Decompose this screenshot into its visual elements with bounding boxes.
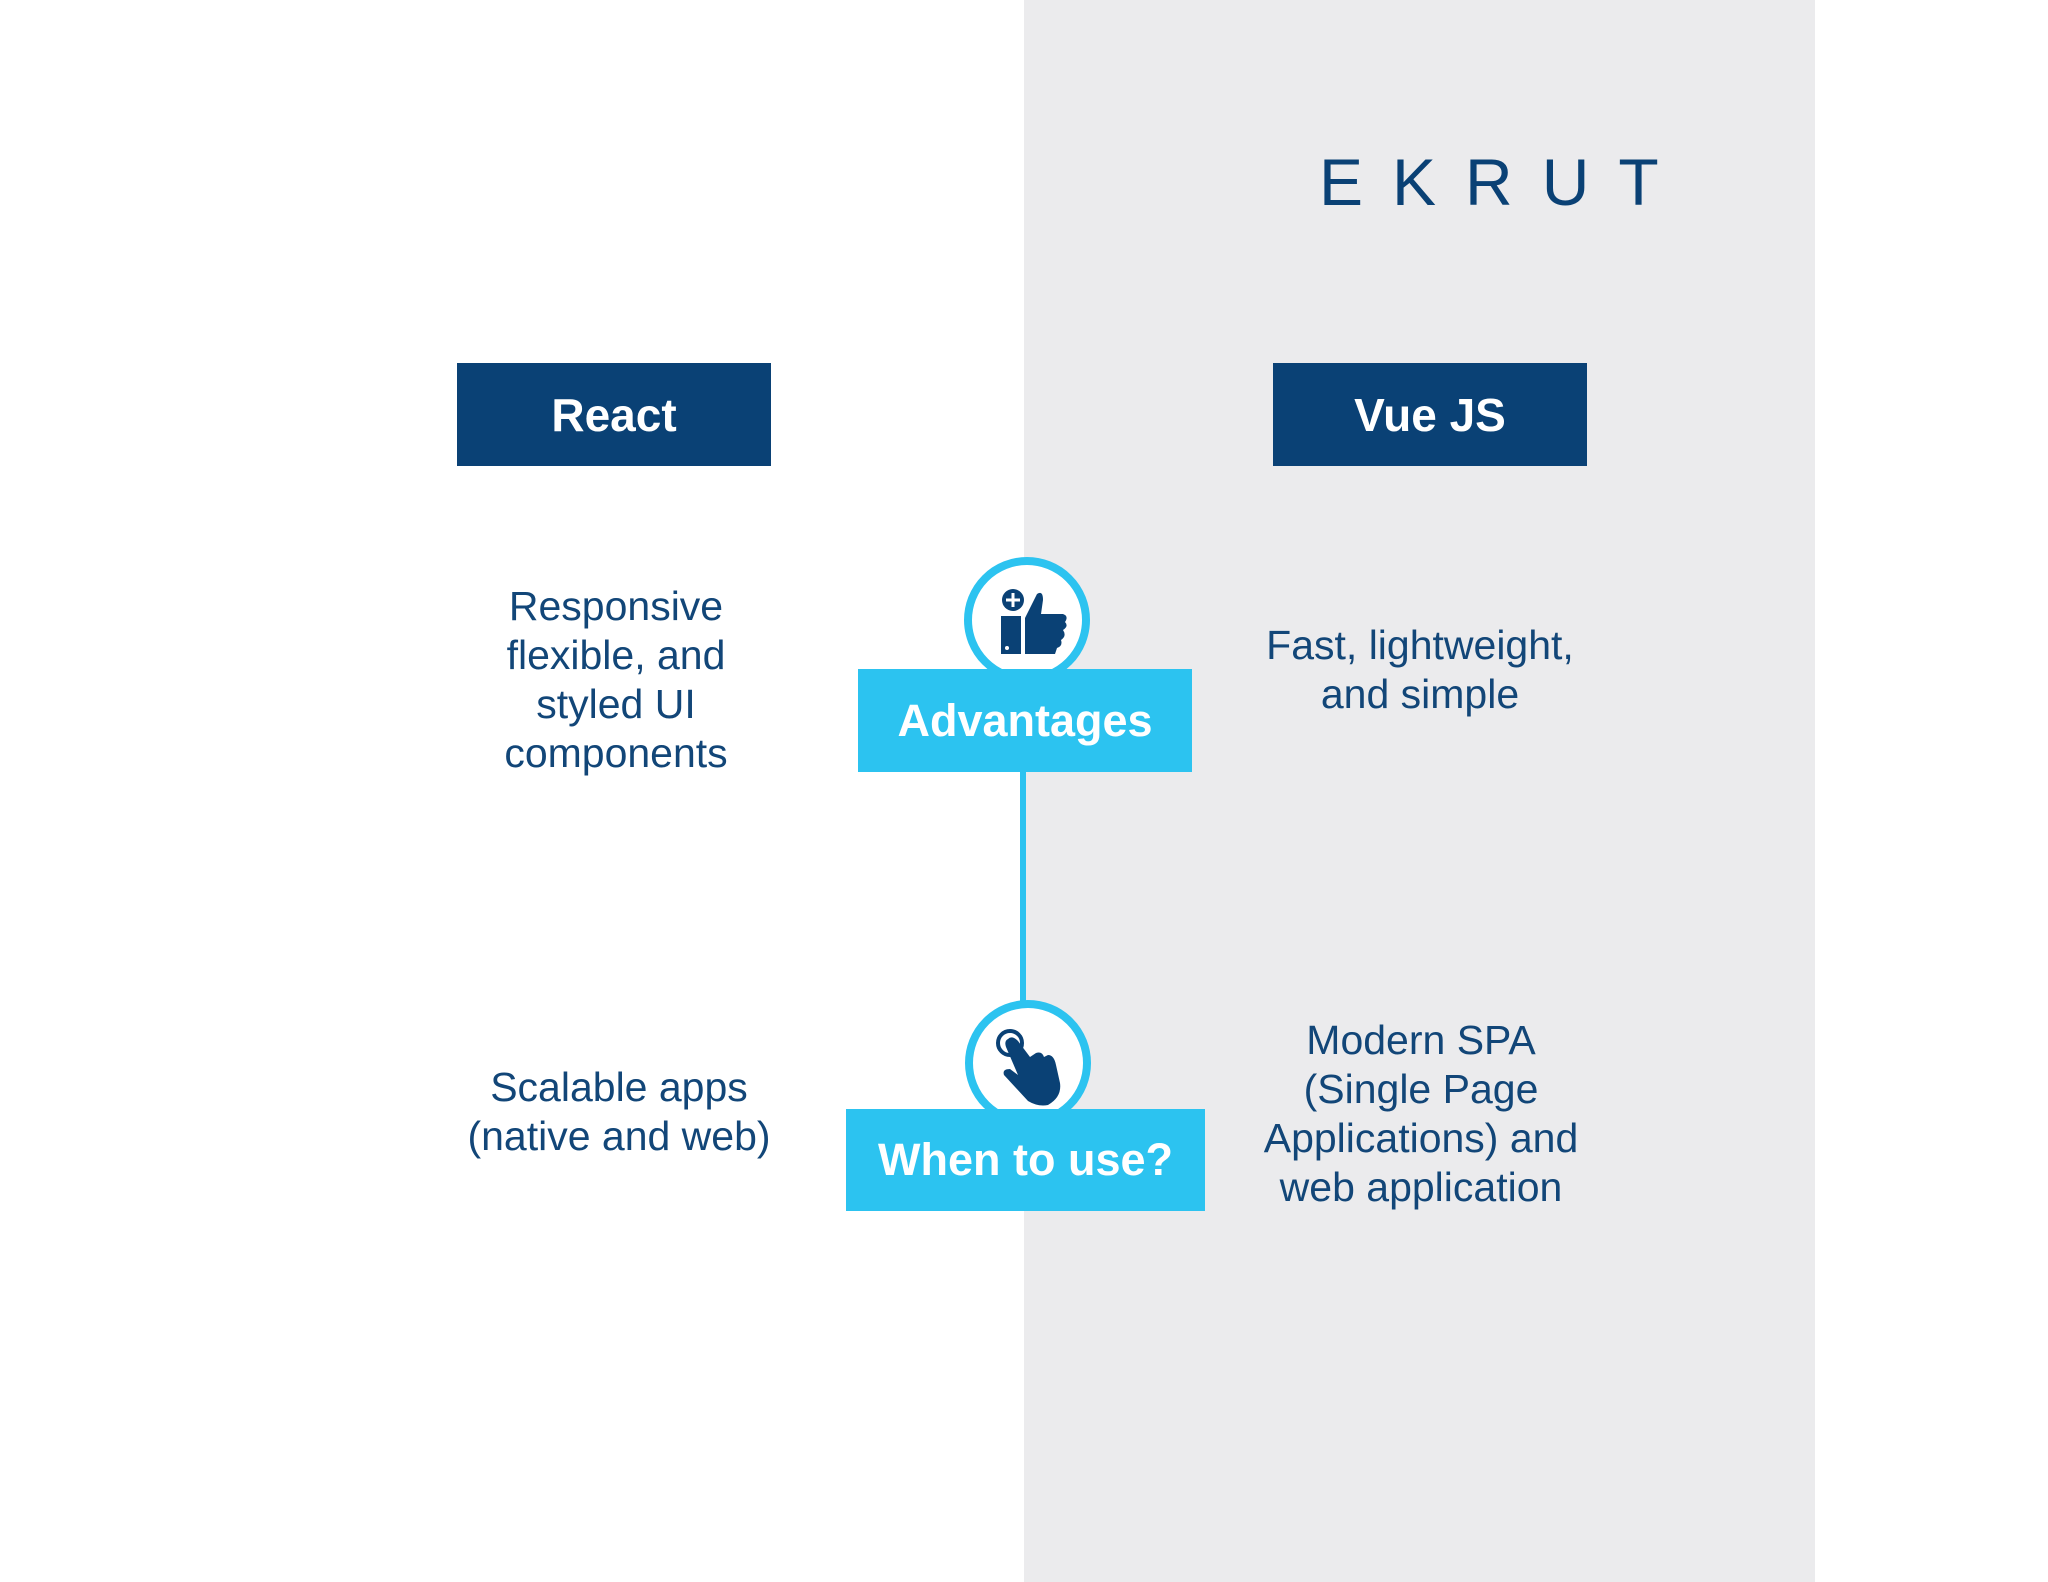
text: Vue when to use	[1264, 1017, 1578, 1210]
text: Vue when to use: (Single Page	[1304, 1066, 1538, 1112]
text: React when to use: (native and web)	[467, 1113, 771, 1159]
text: Vue advantages	[1266, 622, 1574, 717]
text: Vue when to use: Applications) and	[1264, 1115, 1578, 1161]
label: Advantages	[858, 669, 1192, 772]
heading: React: React	[551, 388, 677, 440]
text: React advantages: styled UI	[536, 681, 696, 727]
heading: Vue JS	[1273, 363, 1587, 466]
label: Advantages: Advantages	[897, 694, 1153, 746]
background gray band	[1024, 0, 1815, 1582]
text: React advantages: flexible, and	[507, 632, 725, 678]
icon: pointing hand circle	[965, 1000, 1091, 1109]
text: React advantages: Responsive	[509, 583, 723, 629]
text: Vue advantages: and simple	[1321, 671, 1519, 717]
text: React when to use: Scalable apps	[490, 1064, 748, 1110]
text: Vue when to use: Modern SPA	[1306, 1017, 1536, 1063]
label: When to use?	[846, 1109, 1205, 1211]
text: React advantages	[504, 583, 728, 776]
text: React advantages: components	[504, 730, 728, 776]
heading: Vue JS: Vue JS	[1354, 388, 1506, 440]
text: Vue when to use: web application	[1280, 1164, 1562, 1210]
icon: thumbs up circle	[964, 557, 1090, 669]
connector line	[1020, 760, 1026, 1020]
text: React when to use	[467, 1064, 771, 1159]
label: When to use?: When to use?	[878, 1134, 1173, 1185]
heading: React	[457, 363, 771, 466]
logo: EKRUT: EKRUT	[1319, 145, 1688, 219]
text: Vue advantages: Fast, lightweight,	[1266, 622, 1574, 668]
